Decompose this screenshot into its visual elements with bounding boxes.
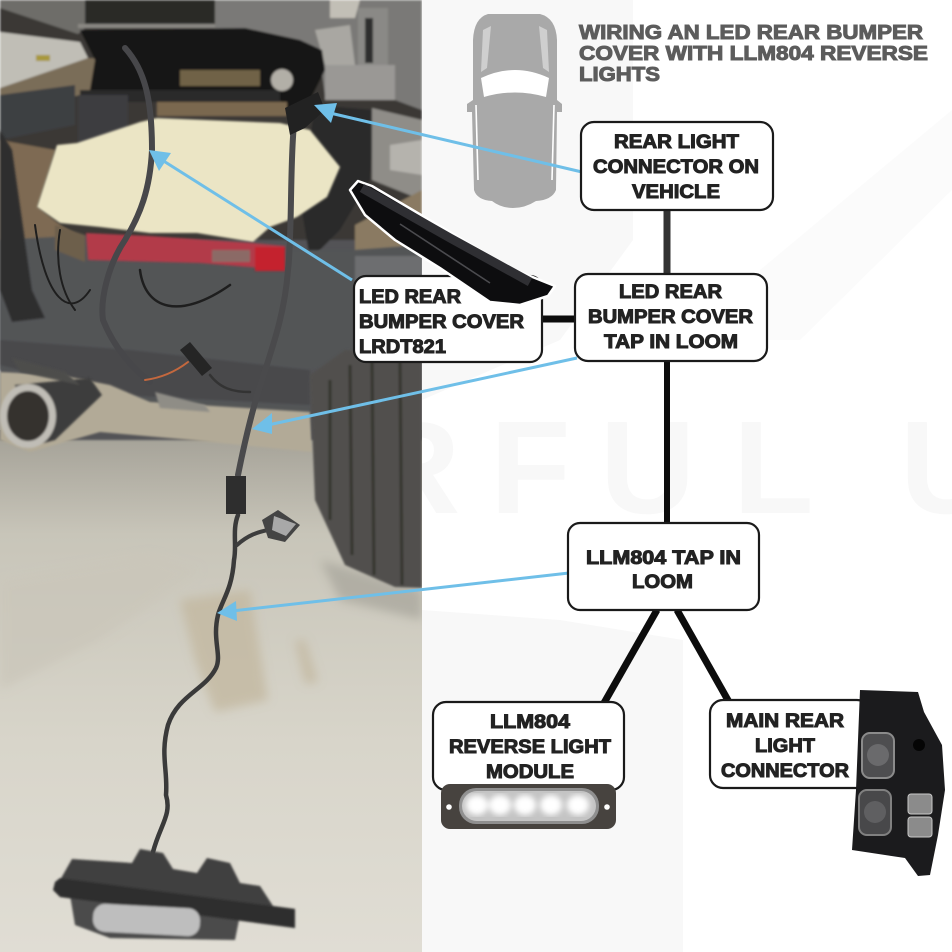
box: LLM804 tap in loom bbox=[568, 523, 759, 610]
box: LED rear bumper cover LRDT821: LRDT821 bbox=[359, 337, 446, 358]
protective cloth bbox=[37, 118, 340, 242]
icon: rear light unit bbox=[852, 690, 945, 876]
box: LLM804 reverse light module: LLM804 bbox=[490, 712, 570, 733]
box: main rear light connector: MAIN REAR bbox=[726, 711, 844, 732]
box: LED rear bumper cover LRDT821 bbox=[354, 276, 542, 362]
box: LED rear bumper cover tap in loom: TAP IN LOOM bbox=[604, 332, 738, 353]
title: COVER WITH LLM804 REVERSE bbox=[579, 43, 928, 65]
icon: LLM804 LED module bbox=[441, 784, 616, 829]
car top-view icon bbox=[467, 14, 562, 208]
arrow: to LED bumper cover loom bbox=[149, 150, 352, 280]
title: LIGHTS bbox=[579, 64, 660, 86]
bumper body bbox=[0, 130, 422, 404]
box: rear light connector on vehicle bbox=[581, 122, 773, 210]
wiring loom bbox=[35, 48, 294, 852]
floor stains bbox=[0, 555, 422, 712]
box: rear light connector on vehicle: CONNECTOR ON bbox=[593, 157, 759, 178]
arrow: to LLM804 tap in loom bbox=[217, 573, 569, 621]
photographed LLM804 assembly on floor bbox=[53, 849, 295, 940]
box: LLM804 reverse light module: MODULE bbox=[486, 762, 574, 783]
box: LED rear bumper cover tap in loom bbox=[575, 274, 767, 361]
red rear light strip bbox=[86, 233, 285, 271]
title: WIRING AN LED REAR BUMPER bbox=[579, 22, 924, 44]
box: LED rear bumper cover tap in loom: LED REAR bbox=[619, 282, 722, 303]
connector lines between boxes bbox=[540, 208, 729, 703]
arrow: to rear light connector bbox=[314, 103, 582, 172]
watermark text: L bbox=[733, 394, 814, 541]
photo: rear of vehicle with wiring loom bbox=[0, 0, 422, 952]
box: LLM804 tap in loom: LLM804 TAP IN bbox=[586, 548, 741, 569]
watermark text: U bbox=[600, 394, 695, 541]
title bbox=[579, 22, 928, 86]
box: main rear light connector: CONNECTOR bbox=[721, 761, 849, 782]
box: main rear light connector: LIGHT bbox=[755, 736, 815, 757]
box: LLM804 reverse light module bbox=[433, 702, 624, 790]
watermark text: F bbox=[490, 394, 571, 541]
box: main rear light connector bbox=[710, 700, 870, 788]
side windows bbox=[481, 26, 491, 72]
box: LLM804 reverse light module: REVERSE LIGHT bbox=[449, 737, 611, 758]
photo floor bbox=[0, 430, 422, 952]
box: rear light connector on vehicle: REAR LIGHT bbox=[614, 132, 739, 153]
upper vehicle structure bbox=[0, 0, 422, 440]
sheet under exhaust bbox=[0, 372, 312, 452]
watermark text bbox=[365, 394, 952, 541]
wiring connectors bbox=[180, 92, 325, 542]
watermark text: R bbox=[365, 394, 460, 541]
tyre bbox=[310, 350, 422, 588]
box: LLM804 tap in loom: LOOM bbox=[632, 572, 693, 593]
box: rear light connector on vehicle: VEHICLE bbox=[632, 182, 720, 203]
box: LED rear bumper cover LRDT821: BUMPER COVER bbox=[359, 312, 524, 333]
box: LED rear bumper cover tap in loom: BUMPER COVER bbox=[588, 307, 753, 328]
windscreen bbox=[481, 70, 549, 97]
icon: LED rear bumper cover part bbox=[350, 181, 555, 305]
exhaust tip bbox=[0, 371, 210, 448]
box: LED rear bumper cover LRDT821: LED REAR bbox=[359, 287, 461, 308]
arrow: to bumper cover tap in loom bbox=[252, 358, 577, 434]
